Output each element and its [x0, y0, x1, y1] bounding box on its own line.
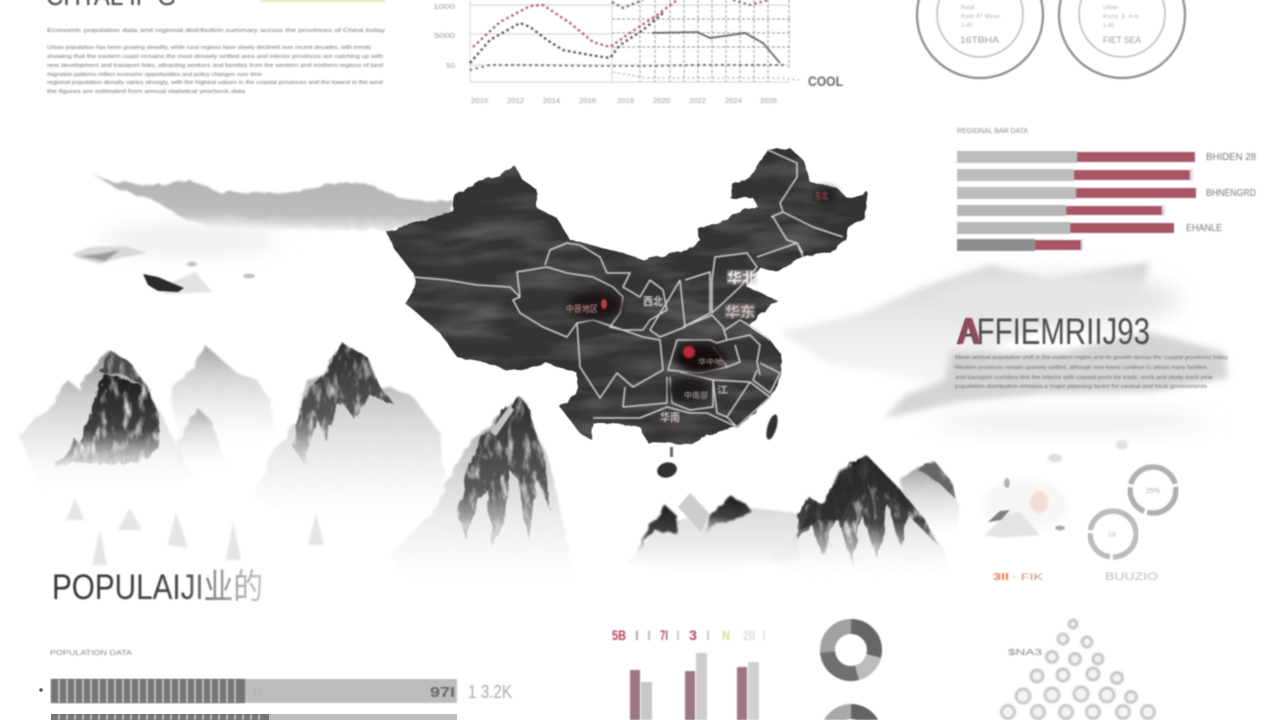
- chart axis labels: 50: [446, 63, 455, 70]
- chart axis labels: 2024: [725, 98, 742, 105]
- right bar labels: BHIDEN 28: [1206, 152, 1256, 163]
- map labels: 华北: [727, 270, 757, 286]
- right text block: Western provinces remain sparsely settled, although new towns continue to attract many families: [955, 365, 1207, 371]
- chart grid: [470, 0, 790, 82]
- donut captions: [993, 571, 1159, 583]
- legend: I: [706, 627, 710, 643]
- map labels: 中原地区: [566, 303, 598, 314]
- bars: [630, 653, 759, 720]
- circle stat: right: [1059, 0, 1185, 78]
- bullet: [39, 688, 43, 692]
- chart axis labels: 2016: [579, 98, 596, 105]
- legend: I: [635, 627, 639, 643]
- bar chart: bottom center: [612, 627, 766, 720]
- map labels: 中南部: [684, 390, 708, 400]
- circle stat: right: Urban: [1103, 5, 1118, 11]
- circle stat: left: Rural: [961, 5, 974, 11]
- ink landscape: upper left ridge: [60, 175, 453, 294]
- map labels: 华南: [660, 410, 680, 424]
- legend: [612, 627, 766, 643]
- chart unit label: COOL: [808, 73, 843, 89]
- chart axis labels: 1000: [433, 4, 455, 11]
- donut captions: 3II: [993, 572, 1009, 583]
- circle stat: left: 1-45: [961, 23, 972, 29]
- legend: I: [647, 627, 651, 643]
- legend: I: [762, 627, 766, 643]
- top-left text block: migration patterns reflect economic opportunities and policy changes over time: [47, 72, 262, 78]
- donut: bottom center upper: [822, 621, 880, 679]
- right title: AFFIEMRIIJ93: [957, 311, 1150, 352]
- chart axis labels: 2018: [617, 98, 634, 105]
- right bar heading: REGIONAL BAR DATA: [957, 128, 1028, 135]
- pictogram label: $NA3: [1008, 648, 1043, 657]
- top-left text block: [47, 28, 385, 95]
- right bar labels: [1186, 152, 1256, 234]
- circle stat: left: [917, 0, 1043, 78]
- ink landscape: faint tree line: [66, 498, 324, 565]
- population bars: 12: [252, 687, 264, 698]
- population subheading: POPULATION DATA: [50, 650, 132, 657]
- line chart: [433, 0, 843, 105]
- pictogram triangle: [1002, 620, 1154, 718]
- donut: lower right: 18: [1108, 532, 1116, 539]
- top-left text block: showing that the eastern coast remains the most densely settled area and interior provinces are catching up with: [47, 54, 383, 60]
- chart axis labels: 2020: [653, 98, 670, 105]
- top-left text block: regional population density varies strongly, with the highest values in the coastal provinces and the lowest in the west: [47, 80, 384, 86]
- chart axis labels: 2026: [760, 98, 777, 105]
- map labels: 华中地: [698, 357, 723, 366]
- donut: upper right: [1130, 467, 1176, 513]
- chart axis labels: 2014: [543, 98, 560, 105]
- legend: 2II: [743, 627, 755, 643]
- map labels: [566, 187, 838, 424]
- population title: POPULAIJI业的: [52, 568, 263, 607]
- circle stat: right: FIET SEA: [1103, 35, 1141, 45]
- top-left text block: new development and transport links, attracting workers and families from the western and northern regions of land: [47, 63, 383, 69]
- map landmass: [387, 148, 868, 445]
- population bars: [39, 650, 512, 720]
- population bars: 1 3.2K: [468, 682, 512, 702]
- right text block: Mean annual population shift in the eastern region and its growth across the coastal provinces today: [955, 355, 1228, 361]
- ink landscape: lower right mist and rocks: [983, 440, 1128, 538]
- right bar chart: [957, 128, 1256, 251]
- legend: 7I: [660, 627, 668, 643]
- legend: 5B: [612, 627, 626, 643]
- donut captions: BUUZIO: [1105, 571, 1159, 583]
- legend: I: [676, 627, 680, 643]
- circle stat: right: 1-45: [1103, 23, 1114, 29]
- right bar labels: BHNENGRD: [1206, 188, 1256, 199]
- map labels: 江: [717, 384, 728, 395]
- map labels: 东北: [815, 190, 828, 201]
- right text block: [955, 355, 1228, 390]
- province borders: [413, 150, 843, 427]
- ink landscape: right cloud band: [780, 262, 1228, 434]
- population values: 97I: [430, 684, 455, 701]
- right text block: population distribution remains a major planning factor for central and local governments: [955, 384, 1207, 390]
- ink landscape: left mountain group: [20, 343, 448, 520]
- chart axis labels: 5000: [434, 33, 455, 40]
- circle stat: left: Rate 47 Mean: [961, 14, 1000, 20]
- circle stat: right: Rate 8 mm: [1103, 14, 1139, 20]
- chart axis labels: 2012: [507, 98, 524, 105]
- map islands: [655, 413, 780, 480]
- top-left text block: the figures are estimated from annual statistical yearbook data: [47, 89, 246, 95]
- top-left text block: Urban population has been growing steadily, while rural regions have slowly declined over recent decades, with trends: [47, 45, 371, 51]
- map labels: 西北: [643, 295, 663, 308]
- ink landscape: central peak: [391, 397, 572, 585]
- chart axis labels: [433, 4, 777, 105]
- donut: upper right: 25%: [1146, 488, 1160, 495]
- top highlight bar: [260, 0, 385, 2]
- legend: N: [722, 627, 730, 643]
- top-left text block: Economic population data and regional distribution summary across the provinces of China today: [47, 28, 385, 34]
- map labels: 华东: [725, 304, 755, 320]
- chart axis labels: 2010: [471, 98, 488, 105]
- donut: bottom center lower: [824, 704, 878, 720]
- donut: lower right: [1090, 511, 1136, 557]
- donut captions: · FIK: [1012, 572, 1043, 582]
- right text block: and transport corridors link the interior with coastal ports for trade, work and study each year: [955, 375, 1213, 381]
- chart series: [470, 0, 800, 80]
- chart axis labels: 2022: [689, 98, 706, 105]
- legend: 3: [689, 627, 697, 643]
- map of China: [387, 148, 868, 480]
- right bar labels: EHANLE: [1186, 223, 1222, 234]
- ink landscape: right mountains: [625, 455, 958, 580]
- circle stat: left: 16TBHA: [960, 35, 999, 45]
